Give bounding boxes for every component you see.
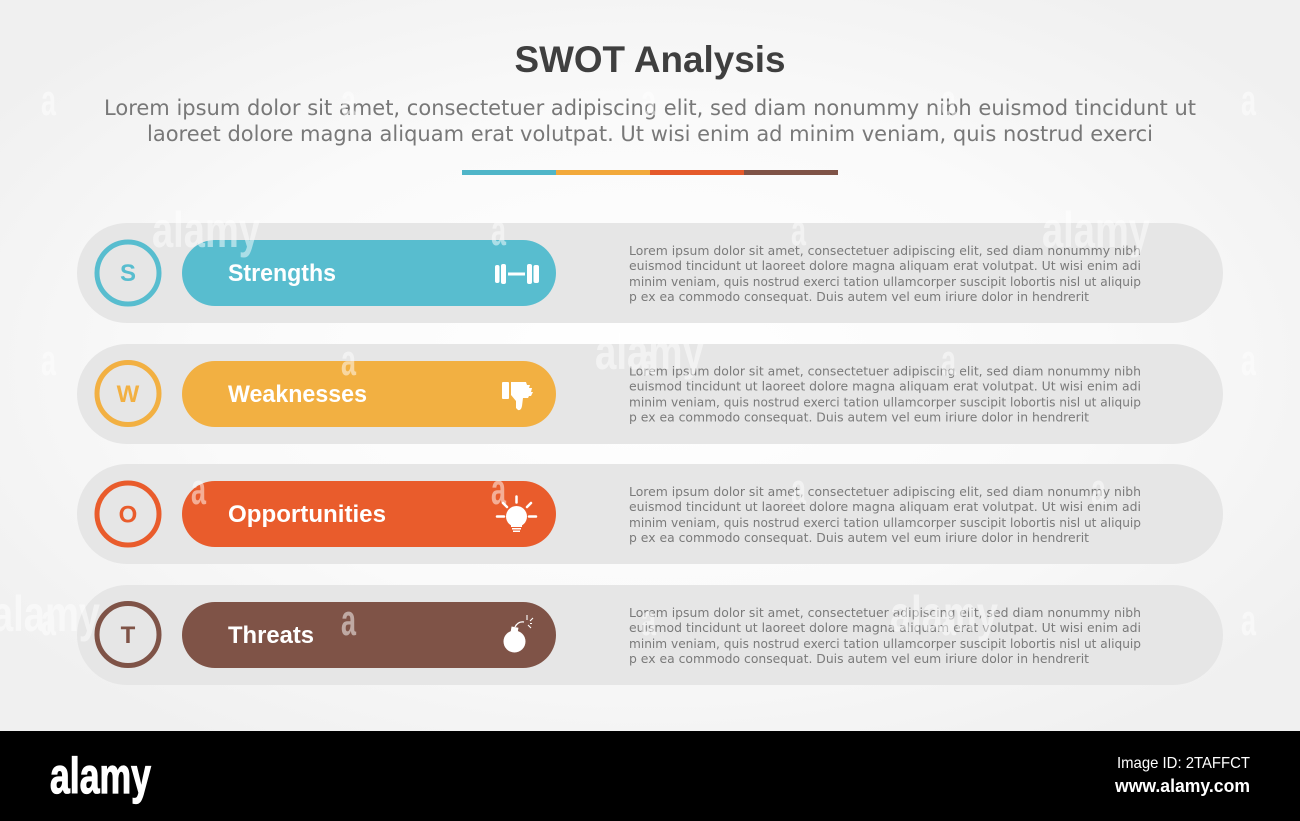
watermarks: a bbox=[641, 76, 656, 125]
row background bbox=[77, 464, 1223, 564]
footer bar bbox=[0, 731, 1300, 821]
icon: light bulb bbox=[497, 496, 536, 532]
row: opportunities bbox=[77, 464, 1223, 564]
letter circle O: O bbox=[119, 502, 137, 528]
watermarks: a bbox=[341, 596, 356, 645]
description: p ex ea commodo consequat. Duis autem vel eum iriure dolor in hendrerit bbox=[629, 531, 1089, 545]
label pill: opportunities: Opportunities bbox=[228, 501, 386, 528]
watermarks: a bbox=[941, 336, 956, 385]
description: Lorem ipsum dolor sit amet, consectetuer adipiscing elit, sed diam nonummy nibh bbox=[629, 364, 1141, 378]
description: Lorem ipsum dolor sit amet, consectetuer adipiscing elit, sed diam nonummy nibh bbox=[629, 485, 1141, 499]
watermarks: alamy bbox=[152, 202, 260, 258]
description: minim veniam, quis nostrud exerci tation ullamcorper suscipit lobortis nisl ut aliquip bbox=[629, 275, 1141, 289]
description: Lorem ipsum dolor sit amet, consectetuer adipiscing elit, sed diam nonummy nibh bbox=[629, 606, 1141, 620]
description bbox=[629, 485, 1141, 545]
row: threats bbox=[77, 585, 1223, 685]
letter circle T bbox=[97, 604, 159, 666]
row: weaknesses bbox=[77, 344, 1223, 444]
label pill: weaknesses: Weaknesses bbox=[228, 381, 367, 408]
intro text: laoreet dolore magna aliquam erat volutpat. Ut wisi enim ad minim veniam, quis nostrud exerci bbox=[147, 122, 1153, 146]
letter circle T: T bbox=[121, 622, 136, 649]
description bbox=[629, 364, 1141, 424]
icon: dumbbell bbox=[495, 264, 539, 284]
description: euismod tincidunt ut laoreet dolore magna aliquam erat volutpat. Ut wisi enim adi bbox=[629, 500, 1141, 514]
watermarks: a bbox=[1241, 76, 1256, 125]
watermarks: a bbox=[191, 465, 206, 514]
row background bbox=[77, 585, 1223, 685]
watermarks: a bbox=[941, 76, 956, 125]
letter circle S bbox=[97, 242, 159, 304]
description: euismod tincidunt ut laoreet dolore magna aliquam erat volutpat. Ut wisi enim adi bbox=[629, 380, 1141, 394]
description: euismod tincidunt ut laoreet dolore magna aliquam erat volutpat. Ut wisi enim adi bbox=[629, 621, 1141, 635]
watermarks: a bbox=[341, 336, 356, 385]
watermarks: alamy bbox=[1042, 202, 1150, 258]
label pill: weaknesses bbox=[182, 361, 556, 427]
label pill: strengths: Strengths bbox=[228, 260, 336, 287]
description: p ex ea commodo consequat. Duis autem vel eum iriure dolor in hendrerit bbox=[629, 652, 1089, 666]
watermarks: a bbox=[491, 465, 506, 514]
watermarks: a bbox=[1241, 596, 1256, 645]
footer url: www.alamy.com bbox=[1114, 776, 1250, 796]
watermarks: alamy bbox=[595, 324, 704, 380]
description: minim veniam, quis nostrud exerci tation ullamcorper suscipit lobortis nisl ut aliquip bbox=[629, 516, 1141, 530]
intro text bbox=[104, 96, 1196, 146]
watermarks: a bbox=[941, 596, 956, 645]
label pill: opportunities bbox=[182, 481, 556, 547]
description bbox=[629, 606, 1141, 666]
watermarks: a bbox=[1091, 465, 1106, 514]
watermarks: a bbox=[341, 76, 356, 125]
description: minim veniam, quis nostrud exerci tation ullamcorper suscipit lobortis nisl ut aliquip bbox=[629, 396, 1141, 410]
footer logo: alamy bbox=[50, 748, 151, 804]
letter circle W bbox=[97, 362, 159, 424]
description: Lorem ipsum dolor sit amet, consectetuer adipiscing elit, sed diam nonummy nibh bbox=[629, 244, 1141, 258]
description: minim veniam, quis nostrud exerci tation ullamcorper suscipit lobortis nisl ut aliquip bbox=[629, 637, 1141, 651]
row background bbox=[77, 223, 1223, 323]
watermarks: a bbox=[791, 465, 806, 514]
watermarks: a bbox=[1241, 336, 1256, 385]
description: p ex ea commodo consequat. Duis autem vel eum iriure dolor in hendrerit bbox=[629, 410, 1089, 424]
colour bar divider bbox=[462, 170, 838, 175]
label pill: threats bbox=[182, 602, 556, 668]
intro text: Lorem ipsum dolor sit amet, consectetuer adipiscing elit, sed diam nonummy nibh euismod tincidunt ut bbox=[104, 96, 1196, 120]
watermarks bbox=[0, 76, 1256, 645]
watermarks: a bbox=[491, 206, 506, 255]
title: SWOT Analysis bbox=[514, 39, 786, 80]
letter circle O bbox=[97, 483, 159, 545]
watermarks: a bbox=[41, 336, 56, 385]
icon: thumbs down bbox=[502, 382, 533, 410]
description: p ex ea commodo consequat. Duis autem vel eum iriure dolor in hendrerit bbox=[629, 290, 1089, 304]
footer image id: Image ID: 2TAFFCT bbox=[1117, 755, 1250, 772]
watermarks: a bbox=[41, 596, 56, 645]
row: strengths bbox=[77, 223, 1223, 323]
letter circle W: W bbox=[117, 381, 140, 408]
label pill: threats: Threats bbox=[228, 622, 314, 649]
icon: bomb bbox=[504, 615, 533, 652]
description bbox=[629, 244, 1141, 304]
row background bbox=[77, 344, 1223, 444]
label pill: strengths bbox=[182, 240, 556, 306]
letter circle S: S bbox=[120, 260, 136, 287]
watermarks: a bbox=[641, 596, 656, 645]
description: euismod tincidunt ut laoreet dolore magna aliquam erat volutpat. Ut wisi enim adi bbox=[629, 259, 1141, 273]
watermarks: a bbox=[791, 206, 806, 255]
watermarks: alamy bbox=[890, 586, 998, 642]
watermarks: a bbox=[641, 336, 656, 385]
watermarks: a bbox=[41, 76, 56, 125]
